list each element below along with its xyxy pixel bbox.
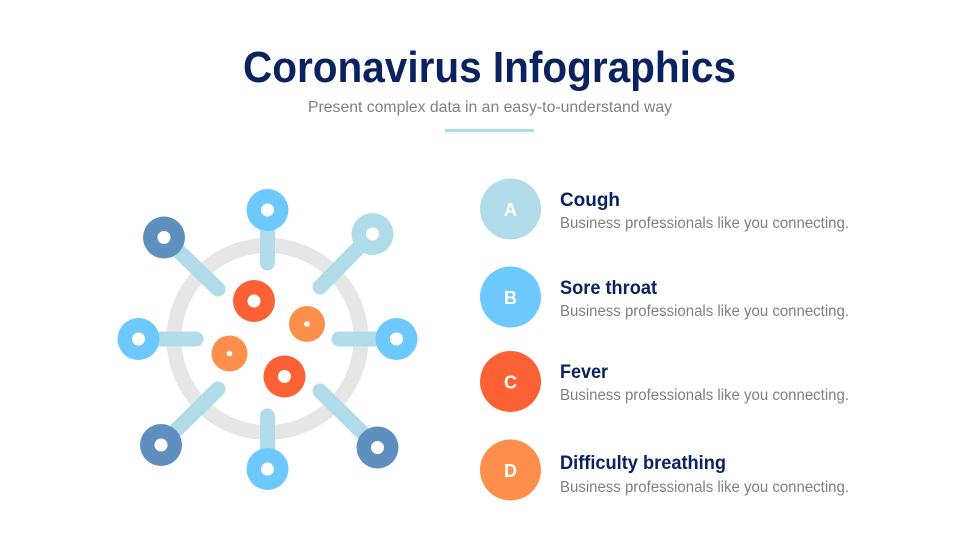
badge A: A (504, 200, 517, 220)
heading: cough: Cough (560, 189, 620, 211)
badge D (480, 440, 541, 500)
spoke: lower left (140, 389, 218, 466)
spoke: top (246, 189, 288, 263)
item A: cough (480, 178, 849, 240)
item B: sore throat (480, 266, 849, 328)
description: Business professionals like you connecting. (560, 215, 849, 232)
description: Business professionals like you connecting. (560, 303, 849, 320)
inner particle: orange left (212, 336, 248, 372)
badge C: C (504, 372, 517, 392)
description: Business professionals like you connecting. (560, 479, 849, 496)
outer ring (174, 246, 361, 432)
spoke: left (118, 318, 196, 360)
inner particle: red bottom (264, 356, 306, 398)
inner particle: red top (233, 280, 275, 322)
badge A (480, 178, 541, 240)
title: Coronavirus Infographics (243, 43, 736, 92)
badge B: B (504, 288, 517, 308)
heading: fever: Fever (560, 361, 608, 383)
spoke: bottom (246, 416, 288, 490)
badge C (480, 351, 541, 412)
badge B (480, 266, 541, 328)
spoke: upper right (320, 213, 394, 287)
heading: sore throat: Sore throat (560, 277, 657, 299)
spoke: lower right (320, 391, 398, 468)
description: Business professionals like you connecting. (560, 387, 849, 404)
title underline (445, 129, 534, 132)
virus diagram (118, 189, 418, 490)
spoke: upper left (143, 216, 218, 289)
spoke: right (339, 318, 418, 360)
badge D: D (504, 461, 517, 481)
inner particle: orange right (289, 306, 325, 342)
heading: difficulty breathing: Difficulty breathing (560, 452, 726, 474)
subtitle: Present complex data in an easy-to-understand way (308, 99, 672, 116)
item D: difficulty breathing (480, 440, 849, 500)
item C: fever (480, 351, 849, 412)
